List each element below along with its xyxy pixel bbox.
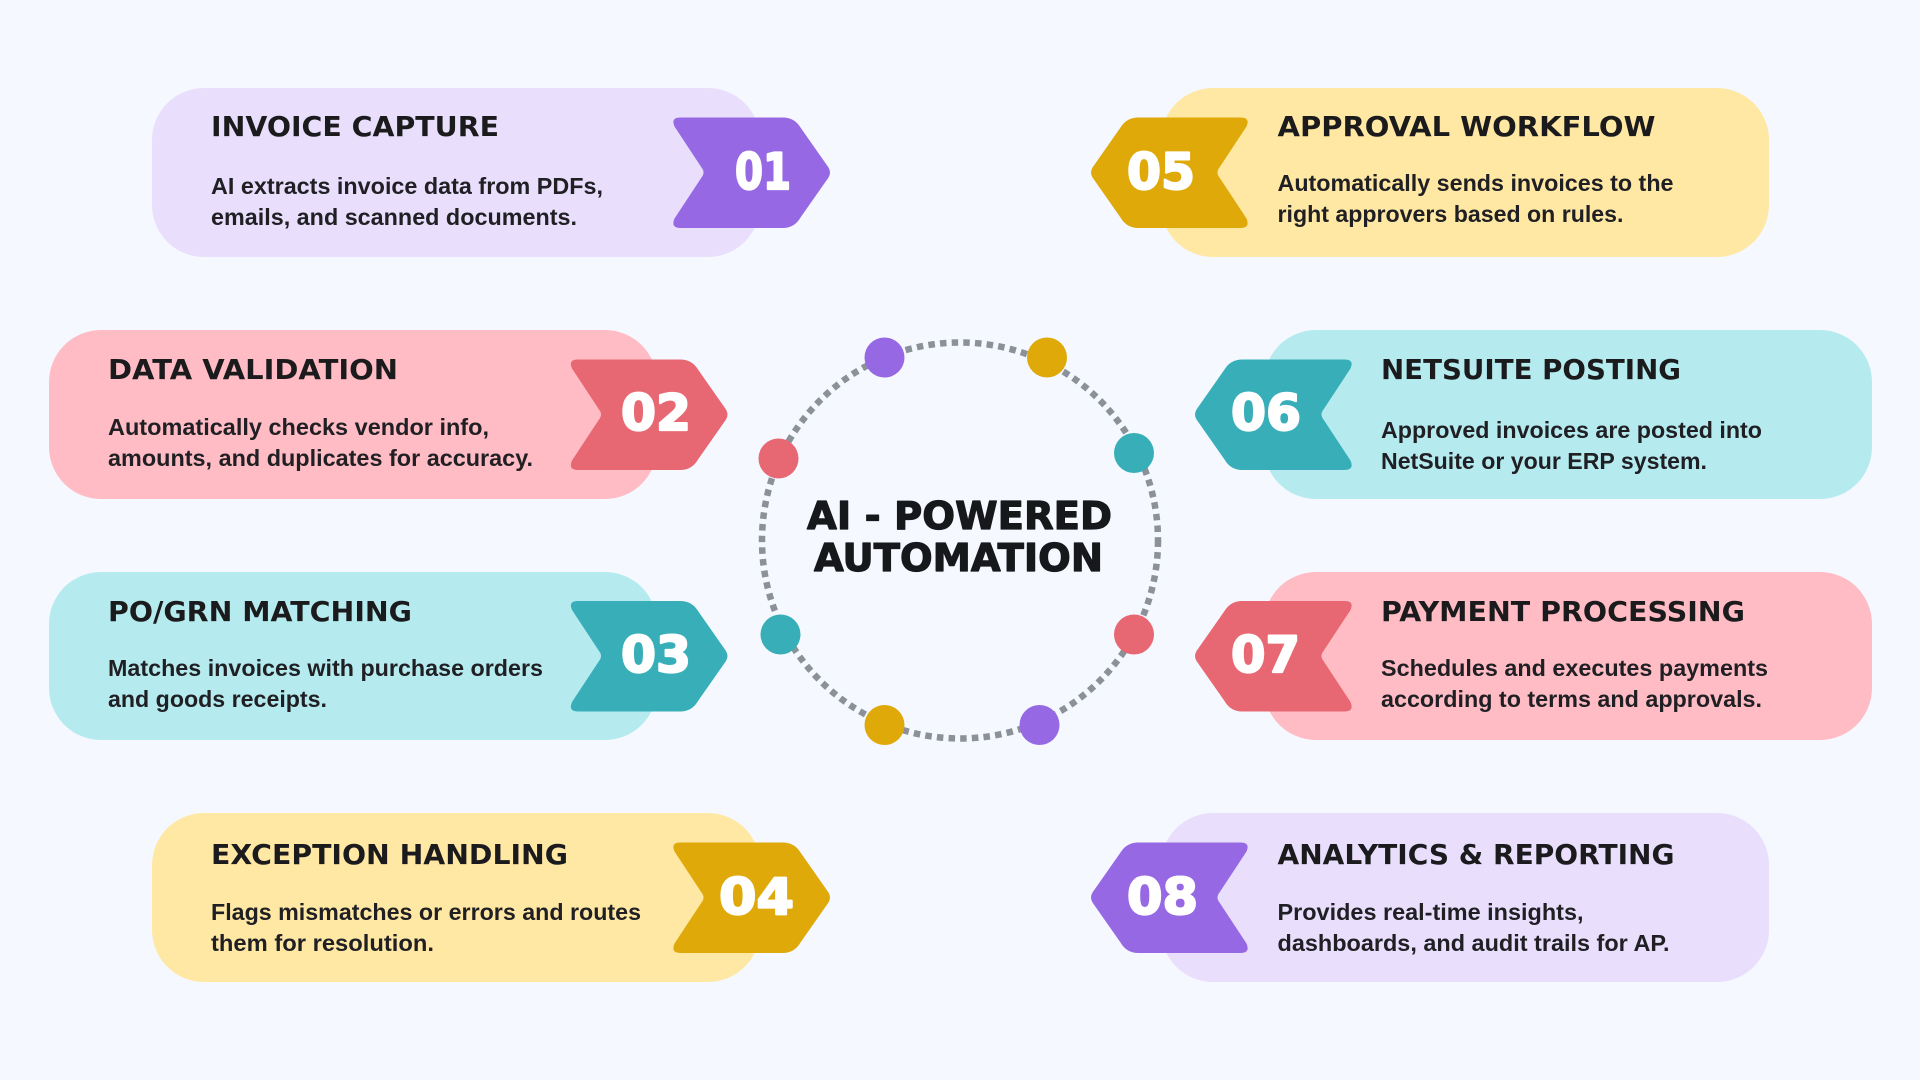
center title: [807, 494, 1112, 581]
central hub: [758, 338, 1158, 745]
dashed ring: [762, 342, 1158, 738]
description: AI extracts invoice data from PDFs,: [211, 173, 603, 199]
card background: [49, 572, 657, 740]
panel: 01 invoice capture: [152, 88, 830, 257]
description: [108, 414, 533, 471]
card background: [152, 88, 760, 257]
description: Schedules and executes payments: [1381, 655, 1768, 681]
badge arrow 01: [673, 118, 830, 228]
description: [1381, 417, 1762, 474]
number 08: 08: [1127, 868, 1198, 926]
number 02: 02: [621, 384, 691, 442]
badge arrow 05: [1091, 118, 1248, 228]
description: them for resolution.: [211, 930, 434, 956]
card background: [49, 330, 657, 499]
description: Matches invoices with purchase orders: [108, 655, 543, 681]
heading: INVOICE CAPTURE: [211, 111, 499, 143]
description: Approved invoices are posted into: [1381, 417, 1762, 443]
description: Automatically sends invoices to the: [1278, 170, 1674, 196]
panel: 03 po/grn matching: [49, 572, 728, 740]
heading: EXCEPTION HANDLING: [211, 839, 568, 871]
panel: 08 analytics and reporting: [1091, 813, 1769, 982]
number 04: 04: [719, 868, 794, 926]
card background: [1264, 330, 1872, 499]
heading: APPROVAL WORKFLOW: [1278, 111, 1656, 143]
description: [211, 899, 641, 956]
ring dots: [758, 338, 1154, 745]
center title: AUTOMATION: [814, 536, 1103, 581]
number 05: 05: [1127, 143, 1195, 201]
card background: [1264, 572, 1872, 740]
card background: [1161, 88, 1769, 257]
badge arrow 02: [571, 360, 728, 470]
description: and goods receipts.: [108, 686, 327, 712]
panel: 02 data validation: [49, 330, 728, 499]
panel: 05 approval workflow: [1091, 88, 1769, 257]
description: [108, 655, 543, 712]
description: according to terms and approvals.: [1381, 686, 1762, 712]
description: [211, 173, 603, 230]
card background: [1161, 813, 1769, 982]
description: amounts, and duplicates for accuracy.: [108, 445, 533, 471]
description: dashboards, and audit trails for AP.: [1278, 930, 1670, 956]
description: Automatically checks vendor info,: [108, 414, 489, 440]
description: NetSuite or your ERP system.: [1381, 448, 1707, 474]
heading: PAYMENT PROCESSING: [1381, 596, 1745, 628]
badge arrow 03: [571, 601, 728, 712]
heading: ANALYTICS & REPORTING: [1278, 839, 1674, 871]
number 03: 03: [621, 626, 691, 684]
panel: 04 exception handling: [152, 813, 830, 982]
heading: NETSUITE POSTING: [1381, 354, 1681, 386]
badge arrow 06: [1195, 360, 1352, 470]
panel: 06 netsuite posting: [1195, 330, 1872, 499]
center title: AI - POWERED: [807, 494, 1112, 539]
number 01: 01: [735, 143, 791, 201]
description: emails, and scanned documents.: [211, 204, 577, 230]
badge arrow 08: [1091, 842, 1248, 953]
description: Flags mismatches or errors and routes: [211, 899, 641, 925]
number 07: 07: [1231, 626, 1300, 684]
description: Provides real-time insights,: [1278, 899, 1584, 925]
description: [1278, 170, 1674, 227]
heading: DATA VALIDATION: [108, 354, 398, 386]
description: right approvers based on rules.: [1278, 201, 1624, 227]
badge arrow 07: [1195, 601, 1352, 712]
heading: PO/GRN MATCHING: [108, 596, 412, 628]
panel: 07 payment processing: [1195, 572, 1872, 740]
number 06: 06: [1231, 384, 1301, 442]
description: [1278, 899, 1670, 956]
badge arrow 04: [673, 842, 830, 953]
description: [1381, 655, 1768, 712]
card background: [152, 813, 760, 982]
